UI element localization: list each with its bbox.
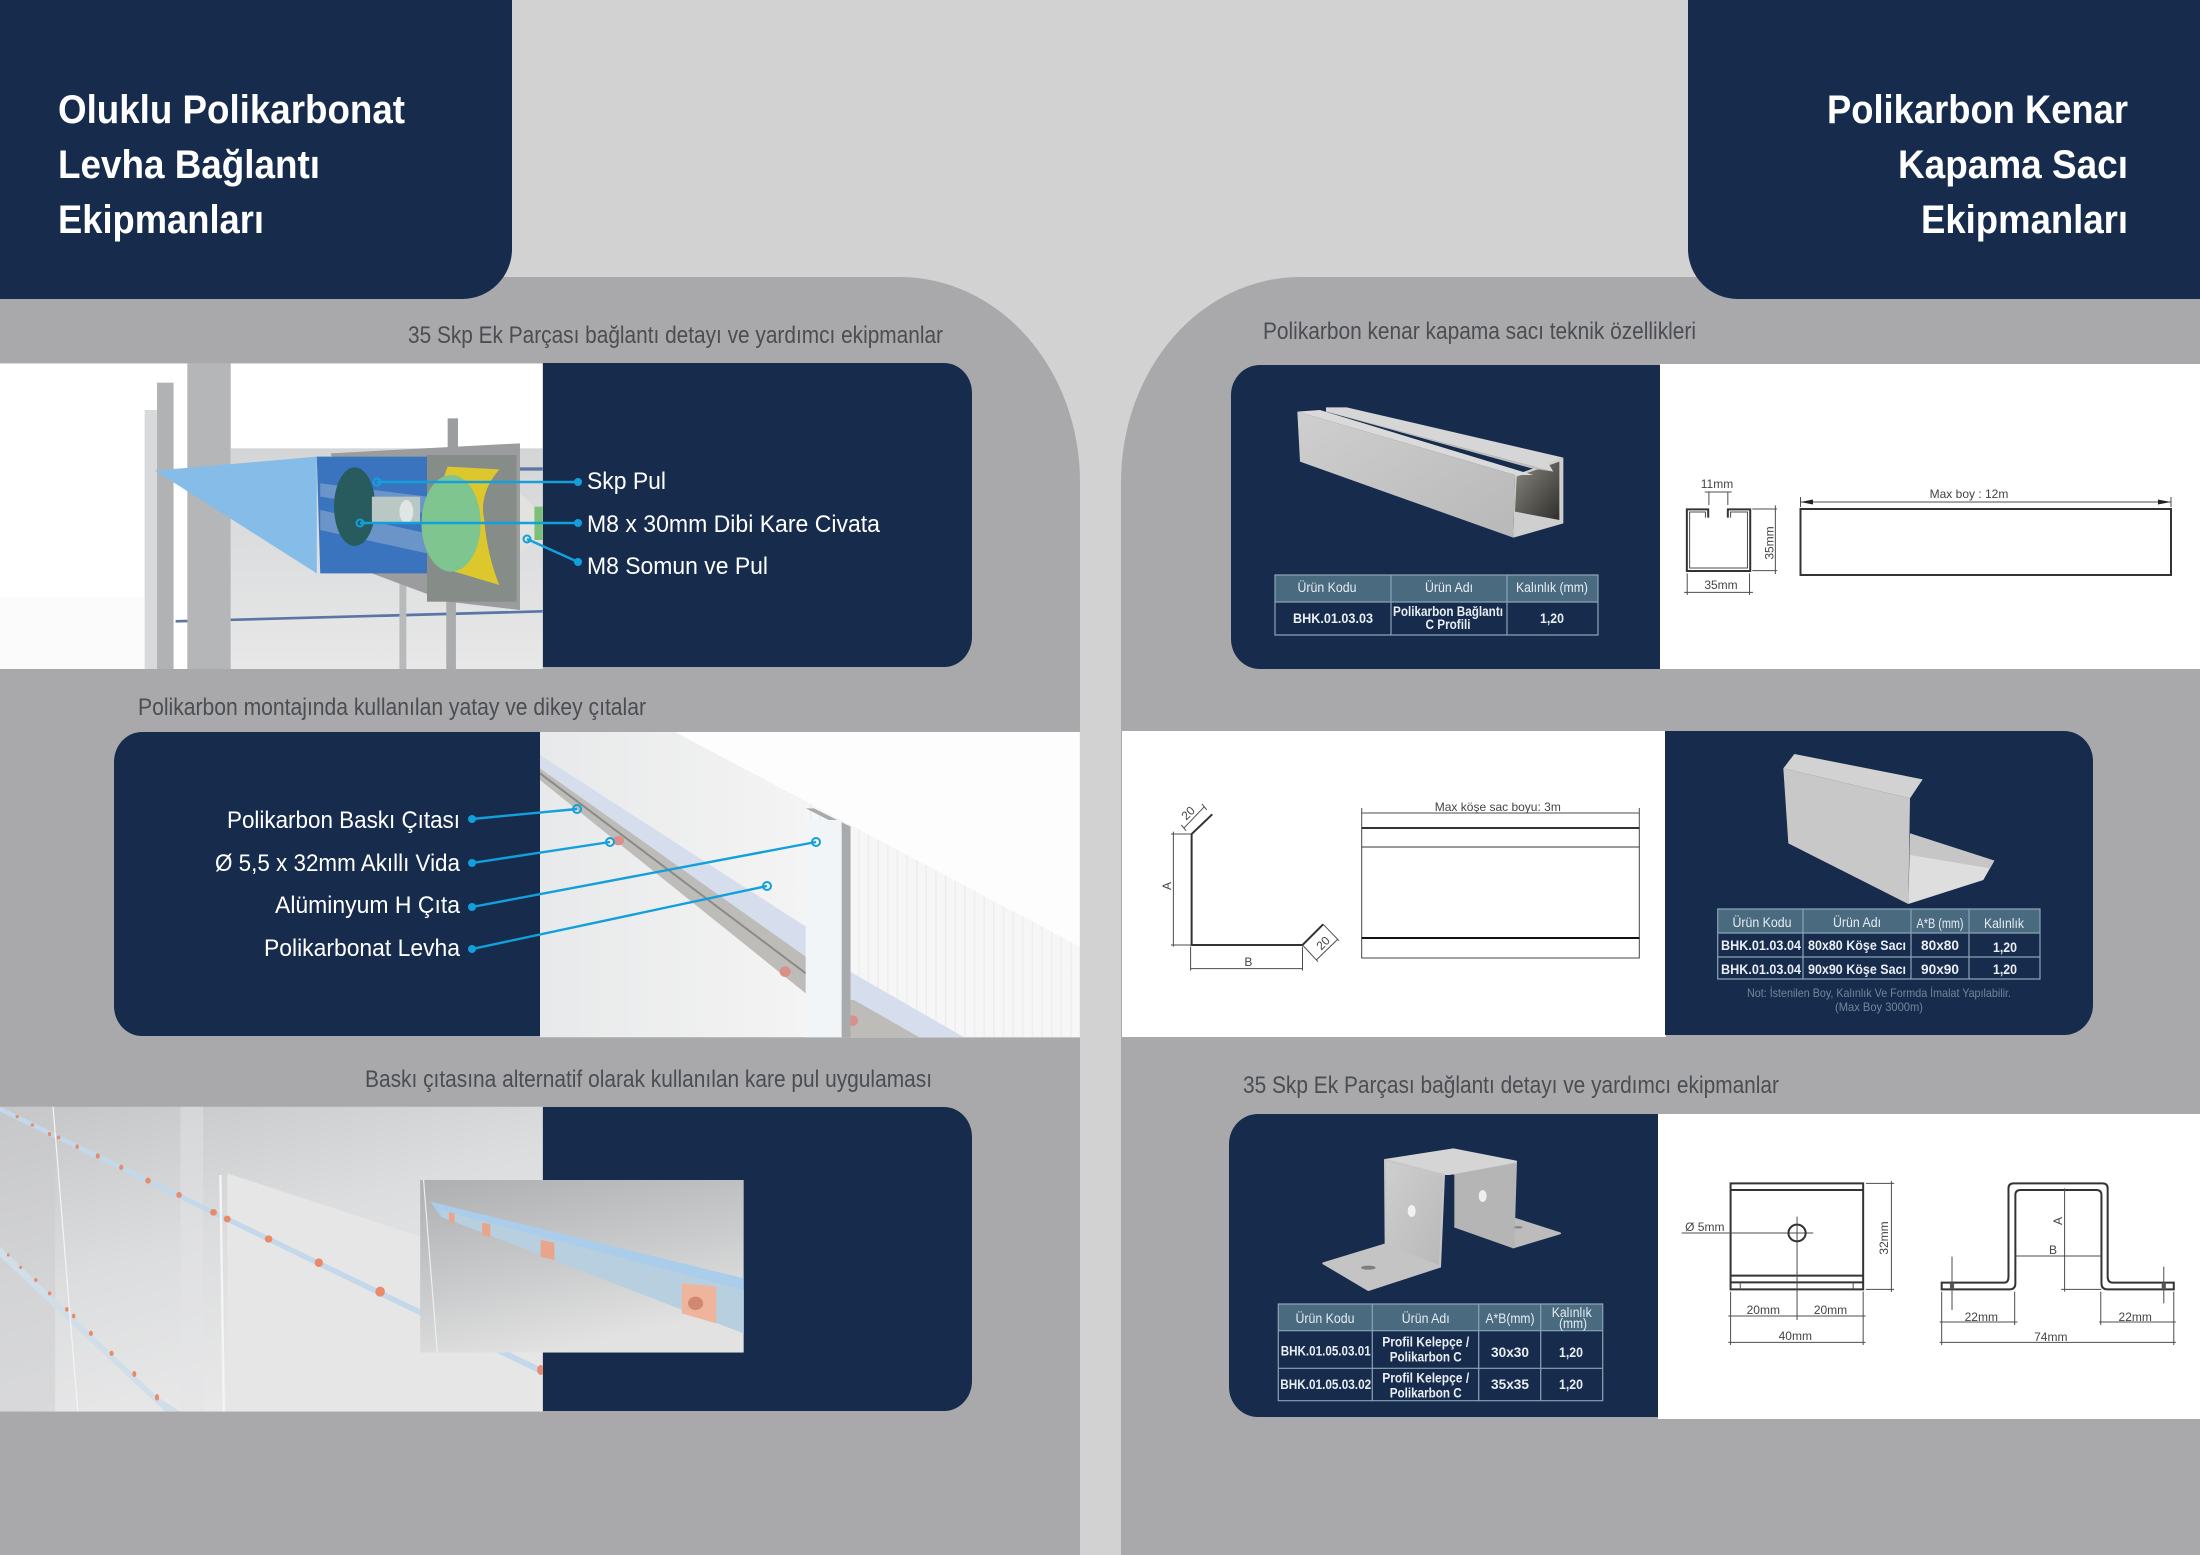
white drawing block bbox=[1122, 731, 1666, 1037]
drawing: clamp front view: 40mm bbox=[1779, 1329, 1812, 1343]
white drawing block bbox=[1660, 364, 2200, 669]
table: corner sheet: BHK.01.03.04 bbox=[1721, 962, 1801, 977]
table: corner sheet: 80x80 bbox=[1921, 938, 1959, 953]
heading: clamp detail: 35 Skp Ek Parçası bağlantı detayı ve yardımcı ekipmanlar bbox=[1243, 1072, 1779, 1099]
navy info block bbox=[543, 363, 972, 667]
table: corner sheet: 90x90 bbox=[1921, 962, 1959, 977]
panel: right title block: Ekipmanları bbox=[1921, 198, 2128, 242]
drawing: corner sheet section: 20 bbox=[1313, 933, 1333, 953]
panel: C profile bbox=[1231, 364, 2200, 669]
callout: M8 bolt: M8 x 30mm Dibi Kare Civata bbox=[587, 511, 881, 538]
panel: left title block bbox=[0, 0, 512, 299]
table: clamp bbox=[1278, 1304, 1603, 1401]
navy info block bbox=[1229, 1114, 1658, 1417]
table: clamp: 1,20 bbox=[1559, 1377, 1583, 1392]
drawing: max length elevation bbox=[1800, 487, 2171, 575]
drawing: clamp front view: 20mm bbox=[1747, 1303, 1780, 1317]
heading: edge profile specs: Polikarbon kenar kapama sacı teknik özellikleri bbox=[1263, 318, 1696, 345]
heading: rails: Polikarbon montajında kullanılan yatay ve dikey çıtalar bbox=[138, 694, 646, 721]
callout: pressure strip: Polikarbon Baskı Çıtası bbox=[227, 807, 460, 834]
callout: smart screw: Ø 5,5 x 32mm Akıllı Vida bbox=[215, 850, 461, 877]
table: clamp: 30x30 bbox=[1491, 1345, 1529, 1360]
drawing: max length elevation: Max boy : 12m bbox=[1930, 487, 2008, 501]
table: corner sheet: 1,20 bbox=[1993, 962, 2017, 977]
table: C profile: Polikarbon Bağlantı bbox=[1393, 604, 1503, 619]
panel: corner sheet bbox=[1122, 731, 2093, 1037]
drawing: C profile section: 35mm bbox=[1704, 578, 1738, 592]
panel: square washer bbox=[0, 1107, 972, 1412]
callout: pressure strip bbox=[227, 805, 581, 834]
callout: M8 nut: M8 Somun ve Pul bbox=[587, 553, 768, 580]
navy info block bbox=[1231, 365, 1660, 669]
photo: skp connection render bbox=[0, 363, 544, 669]
panel: right title block: Polikarbon Kenar bbox=[1827, 88, 2128, 132]
panel: skp connection detail bbox=[0, 363, 972, 669]
table: C profile: C Profili bbox=[1426, 617, 1470, 632]
table: corner sheet: A*B (mm) bbox=[1916, 916, 1964, 931]
table: corner sheet: 90x90 Köşe Sacı bbox=[1808, 962, 1906, 977]
product: C profile bbox=[1297, 407, 1563, 538]
table: corner sheet: Ürün Adı bbox=[1833, 915, 1881, 930]
drawing: C profile section: 35mm bbox=[1762, 526, 1776, 560]
table: clamp: A*B(mm) bbox=[1486, 1311, 1534, 1326]
drawing: corner sheet section bbox=[1160, 803, 1339, 971]
navy info block bbox=[114, 732, 540, 1036]
panel: left title block: Ekipmanları bbox=[58, 198, 264, 242]
photo: square washer wall bbox=[0, 1107, 544, 1412]
drawing: clamp side view: 22mm bbox=[1965, 1310, 1998, 1324]
panel: right gray page bbox=[1121, 277, 2200, 1555]
drawing: corner sheet section: A bbox=[1160, 882, 1174, 890]
drawing: clamp side view: A bbox=[2051, 1217, 2065, 1225]
table: corner sheet: Kalınlık bbox=[1984, 916, 2024, 931]
heading: square washer: Baskı çıtasına alternatif olarak kullanılan kare pul uygulaması bbox=[365, 1066, 932, 1093]
drawing: clamp side view bbox=[1940, 1183, 2176, 1345]
callout: Skp Pul bbox=[374, 468, 666, 495]
table: clamp: BHK.01.05.03.01 bbox=[1281, 1344, 1371, 1358]
drawing: C profile section bbox=[1684, 477, 1777, 595]
table: clamp: Polikarbon C bbox=[1390, 1386, 1462, 1400]
table: clamp: BHK.01.05.03.02 bbox=[1280, 1377, 1371, 1392]
drawing: clamp side view: B bbox=[2049, 1243, 2057, 1257]
table: clamp: Ürün Adı bbox=[1402, 1311, 1450, 1326]
table: C profile: Ürün Kodu bbox=[1298, 580, 1356, 595]
table: corner sheet: BHK.01.03.04 bbox=[1721, 938, 1801, 953]
table: C profile: Kalınlık (mm) bbox=[1516, 580, 1588, 595]
drawing: corner sheet elevation bbox=[1362, 800, 1639, 958]
drawing: corner sheet section: 20 bbox=[1178, 803, 1198, 823]
table: clamp: (mm) bbox=[1559, 1316, 1587, 1331]
table: C profile: Ürün Adı bbox=[1425, 580, 1473, 595]
drawing: corner sheet elevation: Max köşe sac boyu: 3m bbox=[1435, 800, 1561, 814]
white drawing block bbox=[1658, 1114, 2200, 1419]
inset photo: square washer close-up bbox=[420, 1180, 744, 1353]
drawing: clamp front view: Ø 5mm bbox=[1685, 1220, 1724, 1234]
drawing: C profile section: 11mm bbox=[1701, 477, 1733, 491]
drawing: clamp front view: 20mm bbox=[1814, 1303, 1847, 1317]
product: corner sheet bbox=[1783, 754, 1994, 904]
drawing: clamp front view: 32mm bbox=[1877, 1221, 1891, 1255]
panel: right title block bbox=[1688, 0, 2200, 299]
table: C profile: 1,20 bbox=[1540, 611, 1564, 626]
drawing: clamp front view bbox=[1682, 1181, 1894, 1345]
panel: rails bbox=[114, 732, 1080, 1037]
table: corner sheet bbox=[1718, 909, 2040, 979]
drawing: corner sheet section: B bbox=[1244, 955, 1252, 969]
table: clamp: Kalınlık bbox=[1552, 1305, 1592, 1320]
table: corner sheet: 1,20 bbox=[1993, 940, 2017, 955]
table: clamp: 35x35 bbox=[1491, 1377, 1529, 1392]
table: corner sheet: Ürün Kodu bbox=[1732, 915, 1792, 930]
panel: clamp bbox=[1229, 1114, 2200, 1419]
table: clamp: Profil Kelepçe / bbox=[1382, 1334, 1469, 1350]
photo: polycarbonate rails bbox=[540, 732, 1080, 1037]
panel: left title block: Oluklu Polikarbonat bbox=[58, 88, 405, 132]
table: clamp: Polikarbon C bbox=[1390, 1350, 1462, 1364]
note: custom manufacture bbox=[1747, 986, 2011, 1014]
note: custom manufacture: Not: İstenilen Boy, Kalınlık Ve Formda İmalat Yapılabilir. bbox=[1747, 986, 2011, 1000]
note: custom manufacture: (Max Boy 3000m) bbox=[1835, 1000, 1923, 1014]
callout: smart screw bbox=[215, 838, 614, 877]
heading: skp connection detail: 35 Skp Ek Parçası bağlantı detayı ve yardımcı ekipmanlar bbox=[408, 322, 943, 349]
callout: M8 bolt bbox=[356, 511, 881, 538]
navy info block bbox=[543, 1107, 972, 1411]
callout: Skp Pul: Skp Pul bbox=[587, 468, 666, 495]
callout: aluminium H strip bbox=[275, 838, 820, 919]
callout: M8 nut bbox=[524, 536, 768, 580]
callout: polycarbonate sheet: Polikarbonat Levha bbox=[264, 935, 461, 962]
drawing: clamp side view: 74mm bbox=[2034, 1330, 2067, 1344]
panel: left gray page bbox=[0, 277, 1080, 1555]
table: clamp: Ürün Kodu bbox=[1296, 1311, 1354, 1326]
panel: left title block: Levha Bağlantı bbox=[58, 143, 320, 187]
panel: right title block: Kapama Sacı bbox=[1898, 143, 2128, 187]
table: clamp: 1,20 bbox=[1559, 1345, 1583, 1360]
table: corner sheet: 80x80 Köşe Sacı bbox=[1808, 938, 1906, 953]
product: clamp bracket bbox=[1323, 1149, 1560, 1290]
drawing: clamp side view: 22mm bbox=[2119, 1310, 2152, 1324]
callout: polycarbonate sheet bbox=[264, 882, 771, 962]
table: C profile bbox=[1275, 575, 1598, 635]
callout: aluminium H strip: Alüminyum H Çıta bbox=[275, 892, 461, 919]
table: C profile: BHK.01.03.03 bbox=[1293, 611, 1373, 626]
table: clamp: Profil Kelepçe / bbox=[1382, 1370, 1469, 1386]
navy info block bbox=[1665, 731, 2093, 1035]
